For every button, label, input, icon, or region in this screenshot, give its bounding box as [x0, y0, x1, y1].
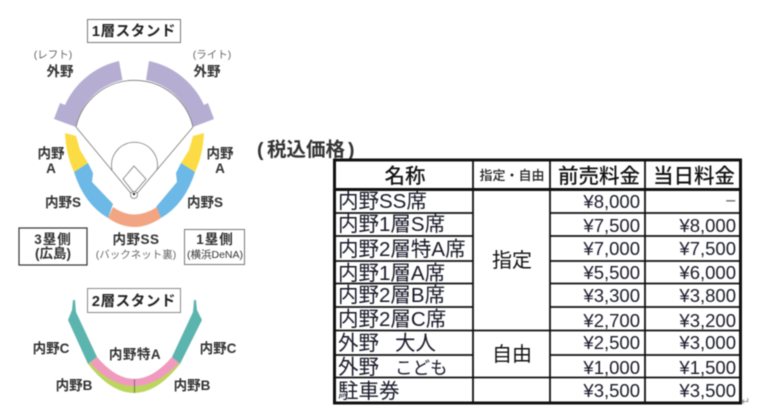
heading: second tier: 2層スタンド	[92, 293, 176, 310]
divider: center line	[134, 379, 136, 393]
table seat names: 内野2層B席	[338, 284, 445, 307]
table advance prices: ¥7,500	[582, 215, 640, 236]
table advance prices: ¥5,500	[582, 262, 640, 283]
table same-day prices: ¥7,500	[678, 238, 736, 259]
table advance prices	[582, 191, 640, 401]
table seat names: 外野	[338, 356, 379, 379]
label: left infield A: A	[46, 161, 56, 176]
heading: second tier	[88, 288, 180, 312]
table same-day prices: −	[725, 190, 736, 211]
icon: return mark: ↵	[741, 396, 750, 408]
seats: right infield A	[181, 133, 204, 172]
panel: second tier stand map	[33, 288, 237, 393]
table same-day prices: ¥1,500	[678, 357, 736, 378]
table advance prices: ¥8,000	[582, 191, 640, 212]
table advance prices: ¥3,500	[582, 380, 640, 401]
table header row: 当日料金	[653, 165, 735, 188]
label: right infield B: 内野B	[174, 377, 211, 393]
field diagram	[76, 80, 193, 198]
table seat names: 内野1層A席	[338, 262, 445, 285]
table advance prices: ¥2,500	[582, 332, 640, 353]
callout: third base side: 3塁側	[34, 232, 72, 247]
label: right outfield: (ライト)	[193, 49, 231, 61]
heading: first tier	[88, 20, 180, 42]
seats: left outfield	[54, 61, 122, 127]
table seat type: 指定	[492, 249, 532, 272]
table seat names: こども	[395, 358, 448, 378]
table seat names	[338, 190, 466, 403]
table seat names: 内野SS席	[338, 190, 427, 213]
seats: left infield C	[68, 300, 97, 364]
table header row: 指定・自由	[479, 168, 545, 183]
label: right infield A	[206, 145, 234, 176]
heading: tax included prices: (	[257, 139, 264, 161]
seats: left infield S	[74, 163, 113, 218]
table seat names: 内野1層S席	[338, 213, 445, 236]
label: left infield A: 内野	[38, 145, 65, 161]
table seat type	[492, 249, 532, 366]
seats: right infield S	[156, 163, 195, 218]
label: left infield A	[38, 145, 65, 176]
table: ticket prices	[333, 160, 741, 403]
label: right infield C: 内野C	[200, 340, 237, 356]
table same-day prices: ¥3,800	[678, 285, 736, 306]
callout: first base side	[184, 230, 244, 264]
table seat names: 内野2層特A席	[338, 238, 466, 261]
table header row: 名称	[384, 165, 426, 188]
label: left outfield	[34, 49, 74, 79]
label: infield SS: (バックネット裏)	[96, 248, 176, 261]
label: right infield A: A	[215, 161, 225, 176]
seats: left infield A	[65, 133, 88, 172]
label: left infield B: 内野B	[56, 377, 93, 393]
heading: tax included prices: 税込価格	[267, 139, 346, 161]
heading: first tier: 1層スタンド	[92, 23, 176, 40]
table seat names: 内野2層C席	[338, 308, 446, 331]
table same-day prices: ¥3,500	[678, 380, 736, 401]
heading: tax included prices: )	[348, 139, 354, 161]
table advance prices: ¥2,700	[582, 310, 640, 331]
seats: infield SS	[108, 207, 161, 227]
label: left outfield: 外野	[46, 63, 74, 79]
seats: infield B	[88, 357, 180, 393]
label: infield SS	[96, 231, 176, 261]
callout: first base side: 1塁側	[196, 232, 234, 247]
callout: first base side: (横浜DeNA)	[187, 248, 243, 261]
table advance prices: ¥3,300	[582, 285, 640, 306]
label: left infield S: 内野S	[45, 194, 81, 210]
label: right outfield	[193, 49, 231, 79]
callout: third base side	[19, 228, 87, 265]
table same-day prices	[678, 190, 736, 401]
seats: infield special A	[90, 357, 179, 386]
table same-day prices: ¥8,000	[678, 215, 736, 236]
table header row	[384, 165, 735, 188]
table advance prices: ¥1,000	[582, 357, 640, 378]
label: right outfield: 外野	[194, 63, 221, 79]
label: infield SS: 内野SS	[112, 231, 160, 247]
label: left outfield: (レフト)	[34, 49, 72, 61]
table advance prices: ¥7,000	[582, 238, 640, 259]
table seat names: 大人	[395, 332, 436, 355]
table seat names: 外野	[338, 332, 379, 355]
label: infield special A: 内野特A	[109, 346, 161, 362]
table same-day prices: ¥6,000	[678, 262, 736, 283]
label: left infield C: 内野C	[33, 340, 70, 356]
table seat names: 駐車券	[338, 380, 400, 403]
callout: third base side: (広島)	[35, 245, 71, 261]
seats: right outfield	[146, 61, 214, 127]
seats: right infield C	[172, 300, 202, 364]
table seat type: 自由	[492, 343, 532, 366]
label: right infield S: 内野S	[187, 194, 223, 210]
table same-day prices: ¥3,000	[678, 332, 736, 353]
table header row: 前売料金	[558, 165, 640, 188]
table same-day prices: ¥3,200	[678, 310, 736, 331]
panel: first tier stand map	[19, 20, 244, 265]
label: right infield A: 内野	[206, 145, 234, 161]
